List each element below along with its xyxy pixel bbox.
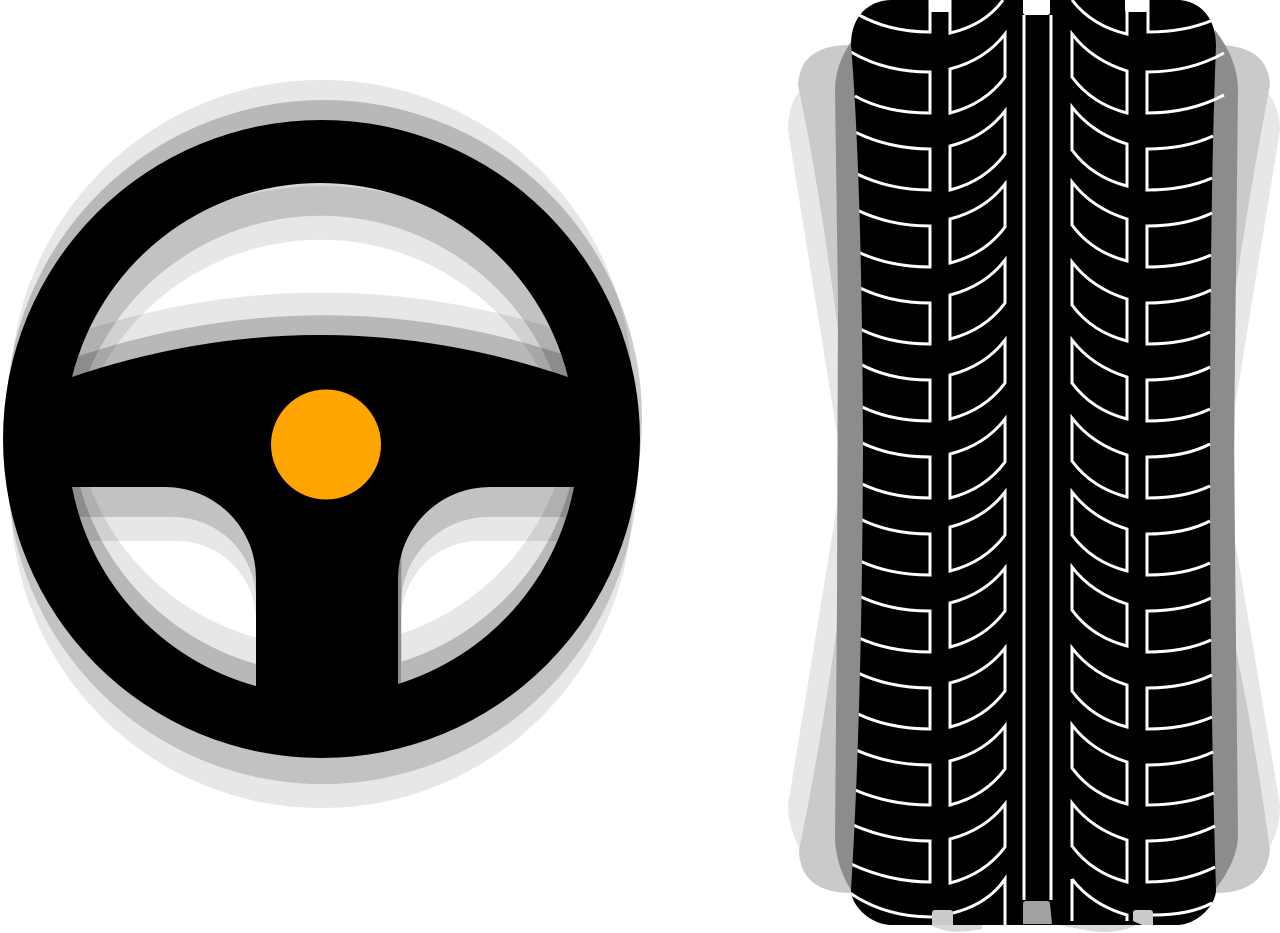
orange hub xyxy=(271,390,381,500)
right inner tread blocks xyxy=(1072,0,1127,921)
center grooves xyxy=(1024,15,1051,900)
left inner tread blocks xyxy=(950,0,1005,925)
left outer tread blocks xyxy=(850,0,932,917)
tire shadow: dark right xyxy=(1195,30,1238,890)
bottom center notch xyxy=(1023,901,1052,924)
wheel shadow: far lower copy xyxy=(10,186,632,808)
tire xyxy=(788,0,1280,932)
bottom notches xyxy=(932,910,1153,925)
wheel shadow: far upper copy xyxy=(10,80,632,702)
tire shadow: pale left xyxy=(788,85,838,850)
tire shadow: bottom xyxy=(930,915,1150,932)
right outer tread blocks xyxy=(1147,0,1224,915)
tire shadow: pale right xyxy=(1234,85,1280,850)
tire shadow: dark left xyxy=(835,42,880,893)
top notches xyxy=(929,0,1147,15)
steering wheel xyxy=(3,80,642,808)
tire shadow: medium right xyxy=(1216,45,1270,893)
tire body xyxy=(851,0,1216,925)
wheel shadow: near upper copy xyxy=(6,100,642,736)
wheel body with three openings xyxy=(3,120,640,758)
wheel shadow: near lower copy xyxy=(7,154,638,784)
tire shadow: medium left xyxy=(798,45,852,893)
